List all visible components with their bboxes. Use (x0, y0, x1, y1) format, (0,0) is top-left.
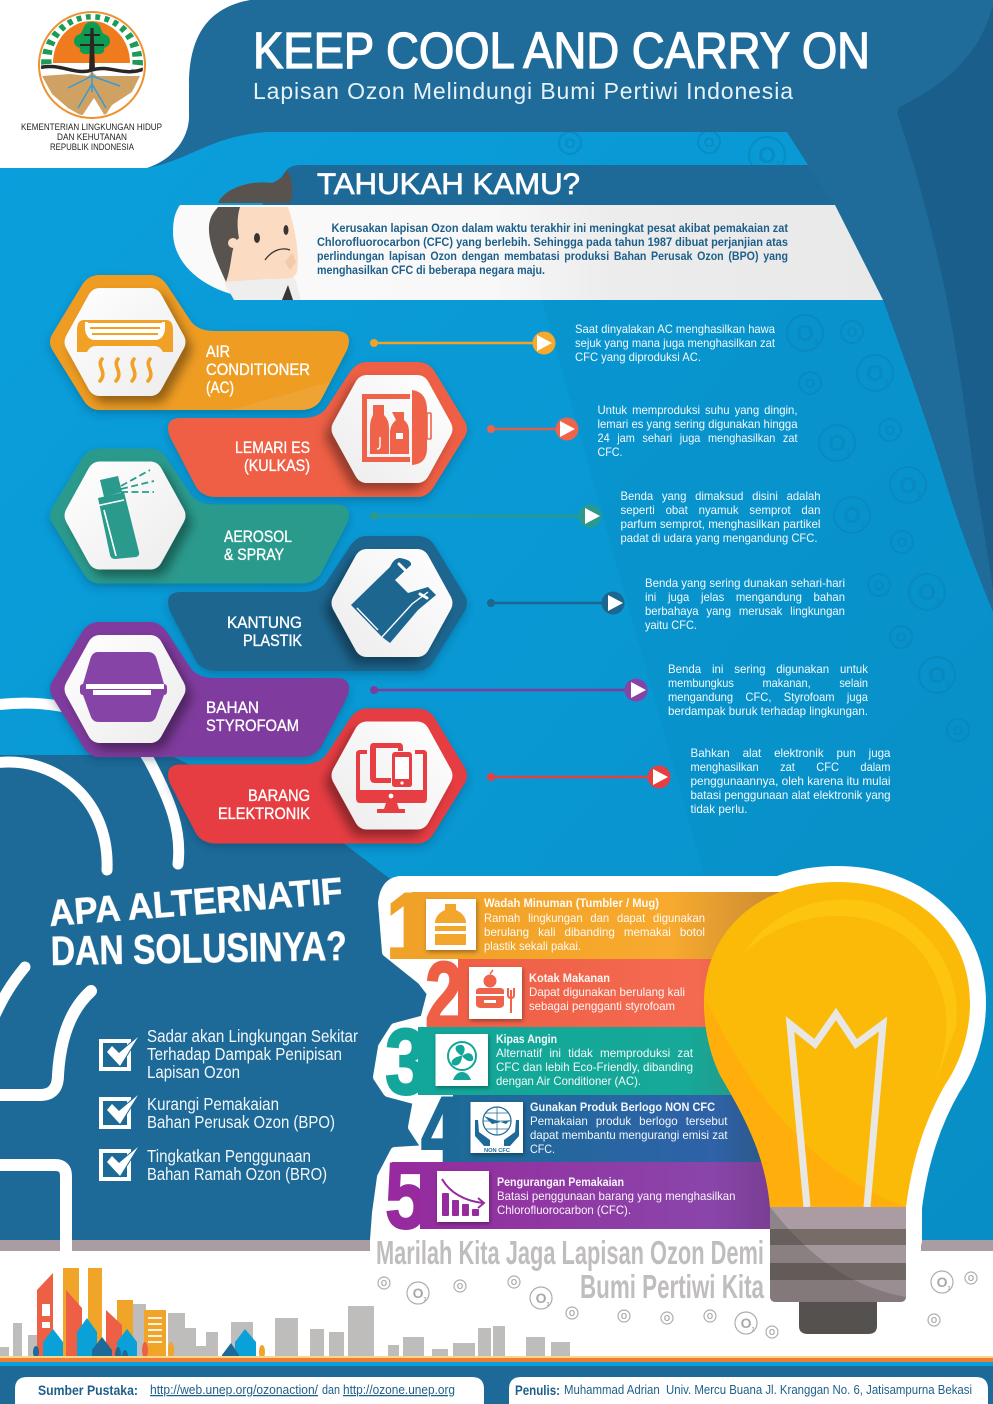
intro paragraph: Chlorofluorocarbon (CFC) yang berlebih. Sehingga pada tahun 1987 dibuat perjanjian atas (317, 235, 788, 249)
ozone watermark circles: O (899, 472, 917, 498)
title: KEEP COOL AND CARRY ON (253, 22, 870, 79)
label: LEMARI ES (235, 438, 310, 457)
ozone icons: bottom: 3 (948, 1286, 951, 1292)
footer: sources: http://web.unep.org/ozonaction/ (150, 1383, 318, 1397)
step 3 (385, 1009, 778, 1114)
ozone icons: bottom: O (511, 1278, 517, 1287)
ozone watermark circles: 3 (917, 490, 922, 499)
icon: non cfc logo (470, 1102, 523, 1154)
label: CONDITIONER (206, 360, 310, 379)
ozone watermark circles: 3 (884, 378, 889, 387)
check item 1: Terhadap Dampak Penipisan (147, 1044, 342, 1064)
footer: author (509, 1377, 988, 1404)
grey skyline (0, 1304, 570, 1359)
ozone watermark circles: O (758, 142, 776, 168)
logo emblem (38, 12, 146, 120)
ozone watermark circles: O (847, 324, 858, 340)
text: styrofoam: membungkus makanan, selain (668, 676, 868, 690)
step 4: Gunakan Produk Berlogo NON CFC (530, 1100, 715, 1114)
text: elektronik (690, 746, 891, 816)
step 2: Kotak Makanan (529, 971, 610, 985)
check item 2 (101, 1094, 335, 1132)
label (235, 438, 310, 475)
closing message: Bumi Pertiwi Kita (580, 1268, 764, 1305)
check item 3: Bahan Ramah Ozon (BRO) (147, 1164, 327, 1184)
step 3: Alternatif ini tidak memproduksi zat (496, 1046, 694, 1060)
houses (33, 1318, 265, 1366)
closing message (376, 1234, 764, 1305)
ozone watermark circles: 3 (814, 338, 819, 347)
icon: food container (80, 652, 167, 722)
character: thinking man (209, 170, 301, 300)
ozone watermark circles: 3 (861, 520, 866, 529)
ozone icons: bottom: O (968, 1274, 974, 1283)
icon: reduction chart (437, 1171, 489, 1222)
step 3: 3 (385, 1009, 427, 1114)
icon: devices (356, 743, 427, 813)
item: lemari es (168, 362, 467, 497)
subtitle: Lapisan Ozon Melindungi Bumi Pertiwi Indonesia (253, 78, 793, 104)
step 2: sebagai pengganti styrofoam (529, 999, 675, 1013)
step 2 (425, 942, 778, 1047)
text: lemari es (598, 403, 798, 459)
icon: plastic bag (351, 558, 436, 643)
text: elektronik: batasi penggunaan alat elektronik yang (690, 788, 890, 802)
text: aerosol: parfum semprot, menghasilkan partikel (620, 517, 820, 531)
step 5: Batasi penggunaan barang yang menghasilkan (497, 1189, 736, 1203)
intro paragraph: Kerusakan lapisan Ozon dalam waktu terakhir ini meningkat pesat akibat pemakaian zat (332, 221, 788, 235)
icon: fan (436, 1034, 488, 1086)
step 1: Ramah lingkungan dan dapat digunakan (484, 911, 705, 925)
ozone watermark circles (559, 131, 969, 741)
label: & SPRAY (224, 545, 284, 564)
step 3: dengan Air Conditioner (AC). (496, 1074, 641, 1088)
check item 3: Tingkatkan Penggunaan (147, 1146, 311, 1166)
heading: apa alternatif dan solusinya: APA ALTERNATIF (47, 870, 344, 934)
logo: REPUBLIK INDONESIA (50, 142, 134, 152)
icon: air conditioner (77, 320, 173, 381)
text: styrofoam (668, 662, 869, 718)
heading band (262, 165, 835, 205)
ozone watermark circles: O (866, 360, 884, 386)
step 5: Chlorofluorocarbon (CFC). (497, 1203, 631, 1217)
ozone watermark circles: O (565, 135, 576, 151)
text: elektronik: Bahkan alat elektronik pun juga (690, 746, 891, 760)
step 4 (421, 1077, 778, 1182)
intro paragraph: menghasilkan CFC di beberapa negara maju. (317, 263, 545, 277)
ozone icons: bottom: 3 (752, 1327, 755, 1333)
step 4: CFC. (530, 1142, 555, 1156)
label: PLASTIK (243, 631, 303, 650)
step 1: 1 (386, 873, 430, 978)
ground stripes (0, 1356, 993, 1404)
ozone icons: bottom: O (381, 1279, 387, 1288)
text: styrofoam: mengandung CFC, Styrofoam juga (668, 690, 868, 704)
label (218, 786, 311, 823)
footer: sources (15, 1377, 484, 1404)
text: kantung: yaitu CFC. (645, 618, 697, 632)
ozone icons: bottom: O (931, 1316, 937, 1325)
ozone watermark circles: O (805, 375, 816, 391)
label (206, 342, 310, 397)
text: lemari es: Untuk memproduksi suhu yang dingin, (598, 403, 798, 417)
ozone icons: bottom: O (741, 1315, 752, 1331)
white area: footer sky (0, 881, 993, 1361)
connector: elektronik (487, 766, 670, 788)
text: lemari es: 24 jam sehari juga menghasilkan zat (598, 431, 798, 445)
white logo corner (0, 0, 250, 168)
check item 1: Lapisan Ozon (147, 1062, 240, 1082)
text: AC: CFC yang diproduksi AC. (575, 350, 701, 364)
filament (790, 1014, 883, 1207)
ozone icons: bottom: O (569, 1309, 575, 1318)
ozone watermark circles: O (704, 134, 715, 150)
ozone icons: bottom: O (769, 1328, 775, 1337)
text: AC: Saat dinyalakan AC menghasilkan hawa (575, 322, 775, 336)
label: STYROFOAM (206, 716, 299, 735)
ozone icons: bottom: O (413, 1285, 424, 1301)
footer: sources: dan (322, 1383, 340, 1397)
logo: DAN KEHUTANAN (57, 132, 127, 142)
text: kantung: berbahaya yang merusak lingkungan (645, 604, 845, 618)
heading: apa alternatif dan solusinya: DAN SOLUSINYA? (50, 923, 347, 974)
item: aerosol (50, 448, 349, 584)
text: aerosol (620, 489, 820, 545)
step 1: Wadah Minuman (Tumbler / Mug) (484, 896, 659, 910)
check item 2: Bahan Perusak Ozon (BPO) (147, 1112, 335, 1132)
text: styrofoam: berdampak buruk terhadap lingkungan. (668, 704, 868, 718)
label: AEROSOL (224, 527, 292, 546)
ozone watermark circles: 3 (908, 546, 911, 552)
intro paragraph (317, 221, 788, 277)
label: KANTUNG (227, 613, 302, 632)
item: barang elektronik (168, 708, 467, 844)
label: BARANG (248, 786, 310, 805)
item: kantung plastik (168, 536, 467, 671)
ozone icons: bottom: O (937, 1274, 948, 1290)
text: elektronik: penggunaannya, oleh karena itu mulai (690, 774, 890, 788)
connector: lemari es (487, 418, 578, 440)
check item 3 (101, 1146, 327, 1184)
text: aerosol: padat di udara yang mengandung CFC. (620, 531, 818, 545)
icon: spray can (96, 470, 154, 559)
ozone watermark circles: O (928, 662, 946, 688)
icon: bottle (426, 899, 476, 950)
icon: non cfc logo: NON CFC (484, 1148, 510, 1154)
text: aerosol: Benda yang dimaksud disini adalah (620, 489, 820, 503)
text: kantung (645, 576, 845, 632)
ozone watermark circles: 3 (776, 160, 781, 169)
logo caption: KEMENTERIAN LINGKUNGAN HIDUP (21, 122, 162, 132)
ozone icons: bottom: O (536, 1290, 547, 1306)
light bulb (704, 882, 970, 1334)
label: BAHAN (206, 698, 259, 717)
text: kantung: ini juga jelas mengandung bahan (645, 590, 845, 604)
ozone watermark circles: O (918, 579, 936, 605)
label (206, 698, 299, 735)
ozone watermark circles: O (885, 422, 896, 438)
ozone watermark circles: 3 (858, 336, 861, 342)
connector: styrofoam (370, 678, 648, 702)
label (227, 613, 303, 650)
step 4: dapat membantu mengurangi emisi zat (530, 1128, 728, 1142)
checklist (101, 1026, 358, 1184)
text panel (173, 205, 883, 300)
ozone watermark circles: 3 (846, 448, 851, 457)
ozone icons: bottom: O (621, 1312, 627, 1321)
footer: sources: http://ozone.unep.org (343, 1383, 455, 1397)
header band (147, 0, 993, 168)
text: elektronik: tidak perlu. (690, 802, 748, 816)
step 4: Pemakaian produk berlogo tersebut (530, 1114, 728, 1128)
ozone watermark circles: 3 (816, 387, 819, 393)
label (224, 527, 292, 564)
connector: aerosol (370, 504, 602, 528)
text: styrofoam: Benda ini sering digunakan untuk (668, 662, 869, 676)
footer: author: Penulis: (515, 1382, 560, 1398)
connector: kantung (487, 592, 624, 614)
icon: lunch box (469, 967, 522, 1019)
heading: TAHUKAH KAMU? (317, 168, 580, 201)
check item 1 (101, 1026, 358, 1082)
white hand outline (0, 703, 179, 1252)
intro paragraph: perlindungan lapisan Ozon dengan membatasi produksi Bahan Perusak Ozon (BPO) yang (317, 249, 788, 263)
ozone watermark circles: O (874, 577, 885, 593)
ozone icons: bottom: 3 (424, 1297, 427, 1303)
check item 1: Sadar akan Lingkungan Sekitar (147, 1026, 358, 1046)
bulb glass (704, 882, 970, 1207)
step 5: 5 (385, 1143, 427, 1248)
bulb base (770, 1207, 906, 1334)
coloured towers (37, 1268, 166, 1358)
ozone watermark circles: O (896, 629, 907, 645)
ozone watermark circles: O (796, 320, 814, 346)
label: AIR (206, 342, 230, 361)
ozone icons: bottom: O (707, 1312, 713, 1321)
ozone watermark circles: O (953, 722, 964, 738)
connector: AC (370, 332, 556, 354)
step 5: Pengurangan Pemakaian (497, 1175, 624, 1189)
dark lower-left panel (0, 755, 440, 1240)
text: lemari es: lemari es yang sering digunakan hingga (598, 417, 798, 431)
item: air conditioner (50, 275, 349, 410)
step 3: CFC dan lebih Eco-Friendly, dibanding (496, 1060, 693, 1074)
step 3: Kipas Angin (496, 1032, 557, 1046)
ozone watermark circles: 3 (964, 734, 967, 740)
ozone watermark circles: 3 (885, 589, 888, 595)
logo (21, 12, 162, 152)
curtain: right side (780, 0, 993, 612)
label: ELEKTRONIK (218, 804, 311, 823)
steps: numbered solutions (385, 873, 790, 1248)
ozone icons: bottom: O (664, 1314, 670, 1323)
text: kantung: Benda yang sering dunakan sehari-hari (645, 576, 845, 590)
heading: apa alternatif dan solusinya (47, 870, 347, 974)
icon: fridge (362, 390, 431, 465)
text: lemari es: CFC. (598, 445, 622, 459)
step 1 (386, 873, 782, 978)
text: elektronik: menghasilkan zat CFC dalam (690, 760, 890, 774)
ozone watermark circles: 3 (936, 597, 941, 606)
check item 2: Kurangi Pemakaian (147, 1094, 279, 1114)
item: bahan styrofoam (50, 622, 349, 757)
text: AC: sejuk yang mana juga menghasilkan zat (575, 336, 776, 350)
ozone watermark circles: O (897, 534, 908, 550)
ozone icons: bottom: O (457, 1282, 463, 1291)
text: AC (575, 322, 776, 364)
cityscape (0, 1268, 570, 1366)
ozone watermark circles: 3 (907, 641, 910, 647)
grey strip (0, 1240, 993, 1251)
text: aerosol: seperti obat nyamuk semprot dan (620, 503, 820, 517)
ozone watermark circles: O (843, 502, 861, 528)
step 2: 2 (425, 942, 463, 1047)
step 1: plastik sekali pakai. (484, 939, 581, 953)
ozone watermark circles: O (828, 430, 846, 456)
footer: sources: Sumber Pustaka: (38, 1382, 138, 1398)
ozone watermark circles: 3 (946, 680, 951, 689)
label: (KULKAS) (244, 456, 310, 475)
step 1: berulang kali dibanding memakai botol (484, 925, 705, 939)
ozone watermark circles: 3 (896, 434, 899, 440)
bulb outline (704, 882, 970, 1260)
closing message: Marilah Kita Jaga Lapisan Ozon Demi (376, 1234, 764, 1271)
panel: tahukah kamu (173, 165, 883, 300)
step 2: Dapat digunakan berulang kali (529, 985, 685, 999)
step 5 (385, 1143, 790, 1248)
ozone icons: bottom: 3 (547, 1302, 550, 1308)
ozone watermark circles: 3 (715, 146, 718, 152)
label: (AC) (206, 378, 234, 397)
ozone icons: bottom (378, 1271, 977, 1338)
step 4: 4 (421, 1077, 459, 1182)
ozone watermark circles: 3 (576, 147, 579, 153)
